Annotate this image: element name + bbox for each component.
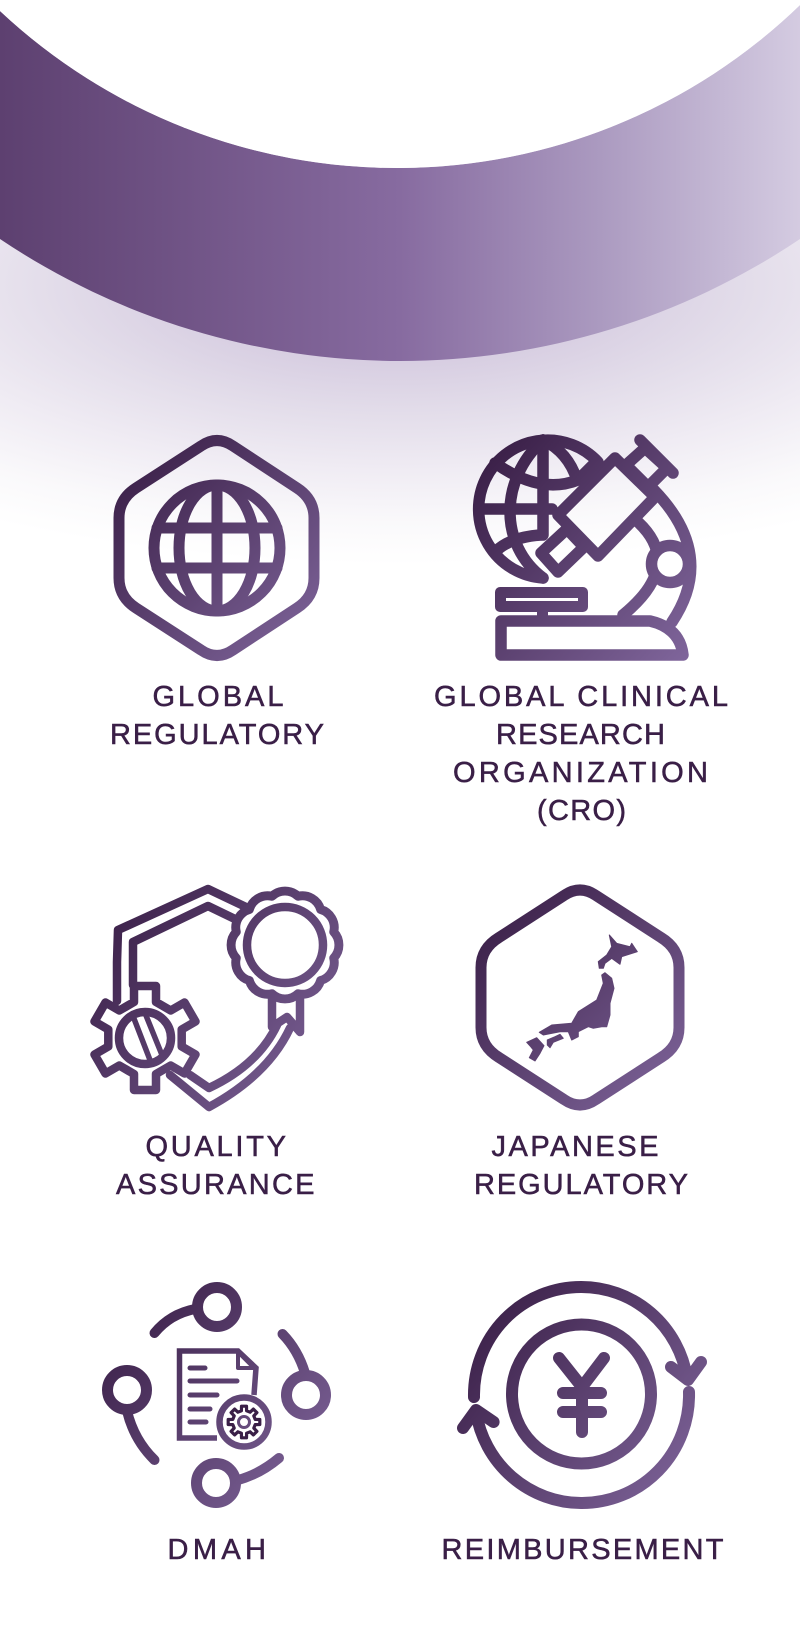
- icon: japan map in hexagon: [481, 890, 679, 1105]
- label: global clinical research organization (CRO): (CRO): [537, 795, 626, 827]
- label: global clinical research organization (CRO): ORGANIZATION: [453, 757, 708, 789]
- label: global regulatory: GLOBAL: [152, 681, 284, 713]
- label: reimbursement: REIMBURSEMENT: [442, 1534, 724, 1566]
- icon: shield with gear and rosette: [94, 889, 339, 1107]
- label: quality assurance: QUALITY: [146, 1131, 286, 1163]
- white cap above band: [0, 0, 800, 168]
- label: japanese regulatory: JAPANESE: [492, 1131, 658, 1163]
- label: DMAH: DMAH: [168, 1534, 266, 1566]
- label: japanese regulatory: REGULATORY: [474, 1169, 688, 1201]
- label: global clinical research organization (CRO): GLOBAL CLINICAL: [434, 681, 728, 713]
- label: quality assurance: ASSURANCE: [116, 1169, 314, 1201]
- label: global regulatory: [110, 681, 324, 751]
- soft shadow under band: [0, 0, 800, 600]
- icon: yen coin with circular arrows: [463, 1287, 701, 1503]
- icon: globe and microscope: [479, 440, 691, 655]
- label: japanese regulatory: [474, 1131, 688, 1201]
- label: global clinical research organization (CRO): RESEARCH: [496, 719, 665, 751]
- icon: global regulatory globe in hexagon: [119, 440, 314, 656]
- curved purple band: [0, 5, 800, 361]
- label: global clinical research organization (CRO): [434, 681, 728, 827]
- label: quality assurance: [116, 1131, 314, 1201]
- label: global regulatory: REGULATORY: [110, 719, 324, 751]
- icon: DMAH document cycle: [108, 1288, 326, 1502]
